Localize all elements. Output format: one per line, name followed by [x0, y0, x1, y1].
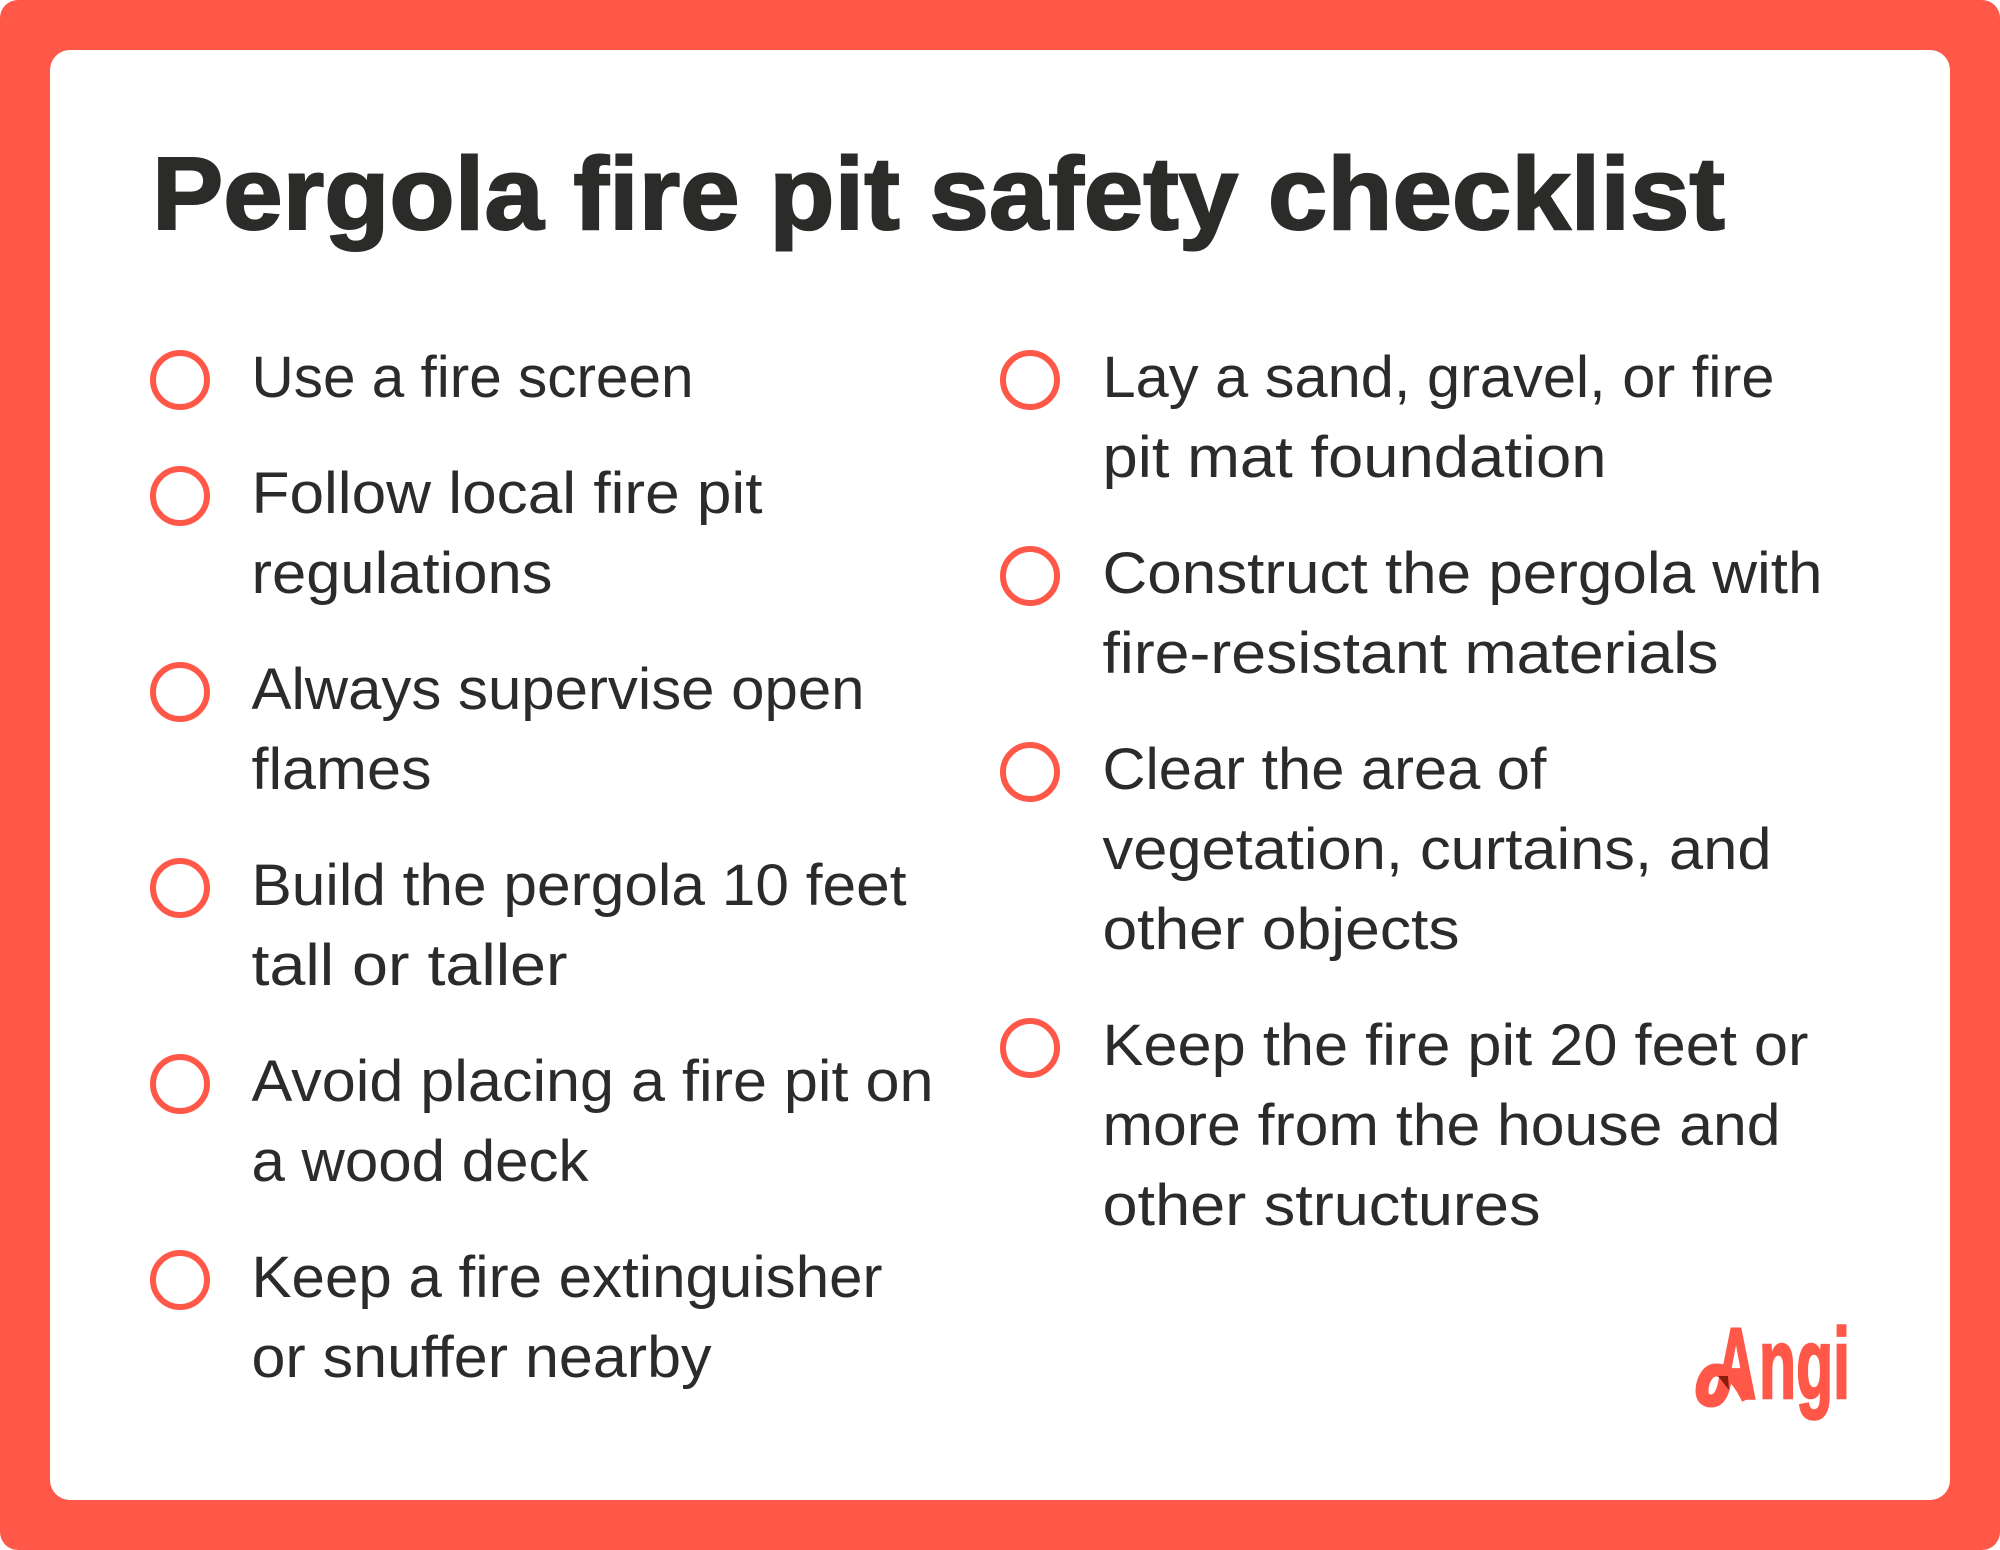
item: avoid wood deck: a wood deck — [252, 1129, 590, 1194]
item: clear the area: other objects — [1102, 897, 1460, 962]
item: supervise open flames: flames — [252, 737, 432, 802]
item: distance from structures — [1003, 1013, 1808, 1238]
item: extinguisher nearby: Keep a fire extinguisher — [252, 1245, 882, 1310]
item: follow local regulations — [153, 461, 762, 606]
item: follow local regulations: regulations — [252, 541, 552, 606]
item: fire-resistant materials: fire-resistant materials — [1102, 621, 1718, 686]
logo: Angi: ngi — [1759, 1308, 1850, 1420]
item: follow local regulations: Follow local fire pit — [252, 461, 762, 526]
item: extinguisher nearby — [153, 1245, 882, 1390]
title: Pergola fire pit safety checklist — [152, 136, 1725, 251]
item: foundation: Lay a sand, gravel, or fire — [1102, 345, 1774, 410]
item: distance from structures: other structures — [1102, 1173, 1540, 1238]
item: pergola height: Build the pergola 10 feet — [252, 853, 906, 918]
item: supervise open flames: Always supervise open — [252, 657, 864, 722]
item: pergola height — [153, 853, 906, 998]
item: avoid wood deck: Avoid placing a fire pit on — [252, 1049, 934, 1114]
item: distance from structures: Keep the fire pit 20 feet or — [1102, 1013, 1808, 1078]
item: pergola height: tall or taller — [252, 933, 568, 998]
panel: right checklist column — [1003, 345, 1822, 1238]
item: foundation: pit mat foundation — [1102, 425, 1606, 490]
item: distance from structures: more from the house and — [1102, 1093, 1780, 1158]
item: fire-resistant materials — [1003, 541, 1822, 686]
item: clear the area: Clear the area of — [1102, 737, 1547, 802]
panel: left checklist column — [153, 345, 934, 1390]
item: clear the area — [1003, 737, 1772, 962]
logo: Angi: A — [1716, 1308, 1756, 1420]
item: extinguisher nearby: or snuffer nearby — [252, 1325, 712, 1390]
item: fire-resistant materials: Construct the pergola with — [1102, 541, 1822, 606]
item: foundation — [1003, 345, 1774, 490]
item: use a fire screen: Use a fire screen — [252, 345, 694, 410]
item: supervise open flames — [153, 657, 864, 802]
logo: Angi — [1702, 1308, 1850, 1420]
item: avoid wood deck — [153, 1049, 934, 1194]
item: clear the area: vegetation, curtains, and — [1102, 817, 1772, 882]
